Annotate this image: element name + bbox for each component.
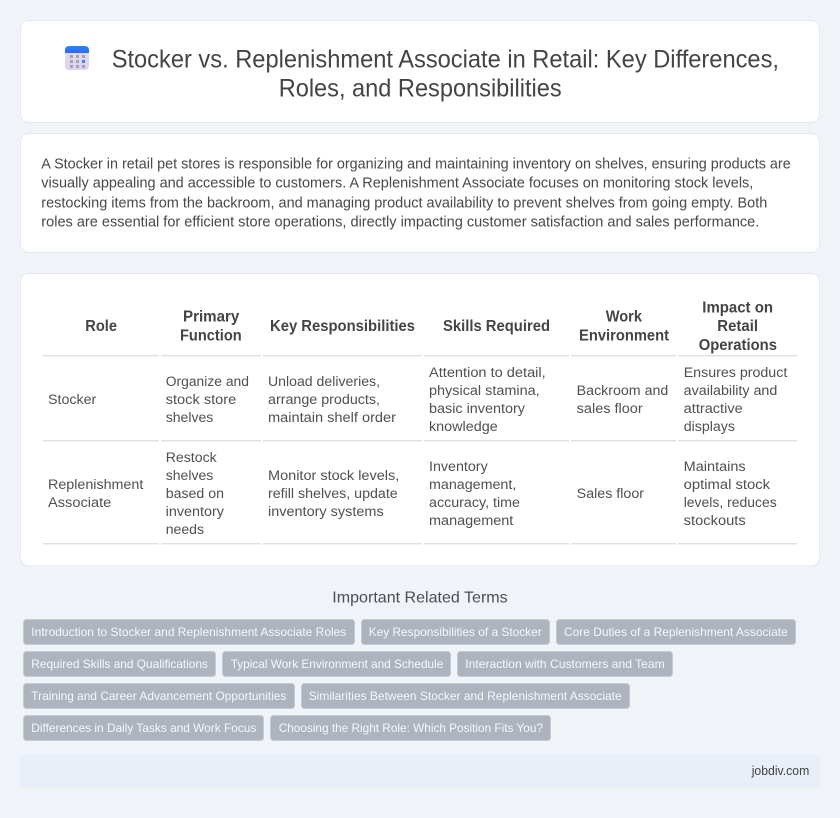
table row: Stocker: Stocker (48, 392, 97, 408)
table header row: Operations (699, 337, 777, 354)
tag: Differences in Daily Tasks and Work Focus (31, 721, 256, 735)
table row: Stocker: Backroom and (577, 383, 668, 399)
tag (24, 652, 216, 676)
table row: Replenishment Associate: Sales floor (577, 486, 644, 502)
text block: description: roles are essential for efficient store operations, directly impacting customer satisfaction and sales performance. (41, 215, 759, 231)
icon: calendar (65, 46, 89, 70)
tag (556, 620, 796, 644)
table row: Replenishment Associate: inventory (166, 504, 225, 520)
table header row: Environment (579, 327, 669, 344)
table row: Replenishment Associate: levels, reduces (684, 495, 777, 511)
table row: Stocker: Organize and (166, 374, 249, 390)
tag: Introduction to Stocker and Replenishment Associate Roles (31, 625, 346, 639)
table header row: Skills Required (443, 318, 550, 335)
tag: Training and Career Advancement Opportunities (31, 689, 286, 703)
text block: description: A Stocker in retail pet stores is responsible for organizing and maintaining inventory on shelves, ensuring products are (41, 156, 791, 172)
table row: Replenishment Associate: optimal stock (684, 477, 771, 493)
tag: Interaction with Customers and Team (465, 657, 665, 671)
table header row (85, 299, 777, 354)
table header row: Primary (183, 308, 240, 325)
table row: Replenishment Associate: Monitor stock levels, (268, 468, 399, 484)
tag (24, 716, 264, 740)
table row: Stocker: maintain shelf order (268, 410, 396, 426)
tag: Core Duties of a Replenishment Associate (564, 625, 788, 639)
table row: Replenishment Associate: accuracy, time (429, 495, 520, 511)
title (112, 46, 779, 103)
tag (24, 620, 354, 644)
tag (362, 620, 550, 644)
table row: Replenishment Associate: needs (166, 522, 204, 538)
title: Roles, and Responsibilities (279, 75, 562, 103)
text block: description: visually appealing and accessible to customers. A Replenishment Associate focuses on monitoring stock levels, (41, 176, 753, 192)
table row: Replenishment Associate: inventory systems (268, 504, 384, 520)
table row: Stocker (48, 365, 787, 435)
panel: comparison table (20, 274, 820, 566)
text block: description: restocking items from the backroom, and managing product availability to prevent shelves from going empty. Both (41, 195, 767, 211)
table row: Replenishment Associate: Inventory (429, 459, 489, 475)
table row: Replenishment Associate (48, 450, 777, 538)
tag (270, 716, 550, 740)
table row: Stocker: Unload deliveries, (268, 374, 380, 390)
table row: Stocker: Attention to detail, (429, 365, 546, 381)
table row: Replenishment Associate: Restock (166, 450, 218, 466)
text block: description (41, 156, 791, 231)
panel: header (20, 20, 820, 122)
table header row: Key Responsibilities (270, 318, 415, 335)
table row: Stocker: basic inventory (429, 401, 526, 417)
title: Stocker vs. Replenishment Associate in Retail: Key Differences, (112, 46, 779, 74)
table row: Stocker: sales floor (577, 401, 643, 417)
tag (302, 684, 630, 708)
tag: Choosing the Right Role: Which Position Fits You? (279, 721, 543, 735)
table row: Replenishment Associate: based on (166, 486, 224, 502)
tag (24, 684, 294, 708)
tag list: related terms (24, 620, 796, 740)
table row: Replenishment Associate: shelves (166, 468, 213, 484)
table row: Stocker: Ensures product (684, 365, 787, 381)
table row: Stocker: arrange products, (268, 392, 380, 408)
table row: Stocker: availability and (684, 383, 777, 399)
table header row: Work (606, 308, 642, 325)
table row: Replenishment Associate: Maintains (684, 459, 746, 475)
table row: Stocker: displays (684, 419, 735, 435)
table row: Stocker: attractive (684, 401, 743, 417)
footer (20, 754, 820, 788)
heading: important related terms: Important Related Terms (332, 589, 508, 606)
tag: Required Skills and Qualifications (31, 657, 208, 671)
tag (222, 652, 450, 676)
table header row: Retail (717, 318, 758, 335)
tag (458, 652, 672, 676)
table row: Stocker: stock store (166, 392, 236, 408)
table row: Stocker: shelves (166, 410, 213, 426)
tag: Typical Work Environment and Schedule (231, 657, 444, 671)
table row: Replenishment Associate: stockouts (684, 513, 746, 529)
tag: Similarities Between Stocker and Replenishment Associate (309, 689, 622, 703)
table row: Replenishment Associate: Replenishment (48, 477, 143, 493)
table row: Stocker: physical stamina, (429, 383, 540, 399)
table header row: Role (85, 318, 117, 335)
table row: Replenishment Associate: management (429, 513, 513, 529)
panel: description (20, 134, 820, 252)
table row: Replenishment Associate: refill shelves, update (268, 486, 398, 502)
table row: Replenishment Associate: management, (429, 477, 516, 493)
footer source: jobdiv.com (751, 764, 809, 778)
tag: Key Responsibilities of a Stocker (369, 625, 542, 639)
table row: Stocker: knowledge (429, 419, 498, 435)
table row: Replenishment Associate: Associate (48, 495, 111, 511)
table header row: Impact on (702, 299, 773, 316)
table header row: Function (180, 327, 242, 344)
